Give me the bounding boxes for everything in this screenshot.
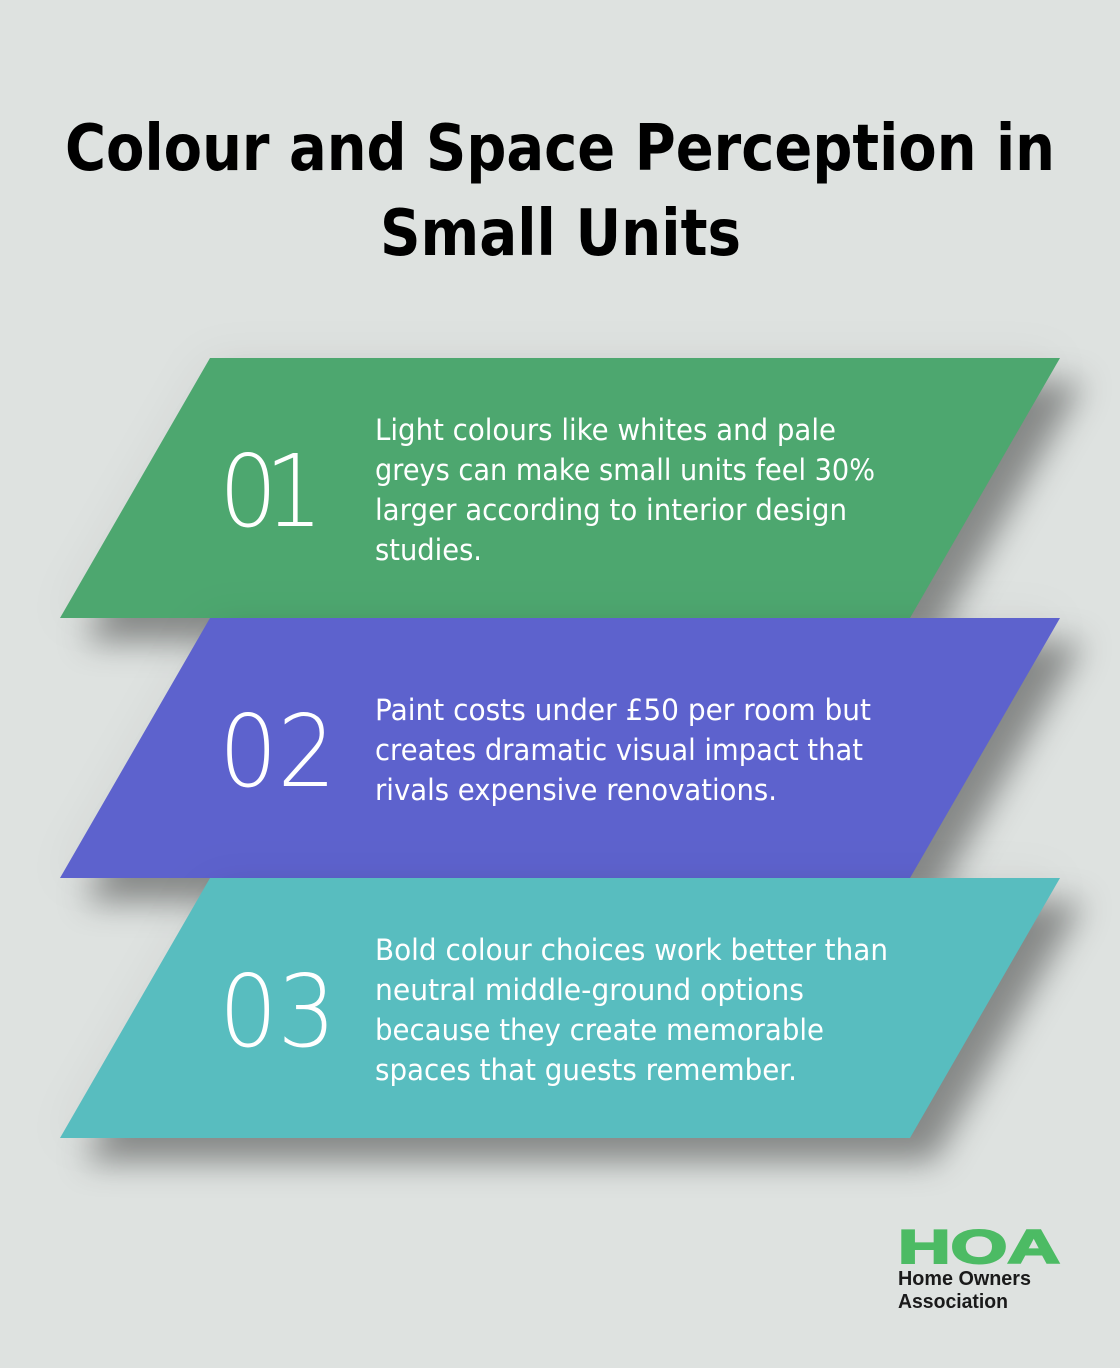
panel: step 03 — [60, 878, 1084, 1162]
title: Small Units — [380, 197, 741, 271]
text: step 03 description: neutral middle-ground options — [375, 973, 804, 1007]
text: step 03 description — [375, 933, 888, 1087]
panel: step 01 — [60, 358, 1084, 642]
text: step 02 description: creates dramatic visual impact that — [375, 733, 863, 767]
shape: teal parallelogram — [60, 878, 1060, 1138]
text: step 02 description — [375, 693, 871, 807]
text: step 02 description: Paint costs under £50 per room but — [375, 693, 871, 727]
logo subtitle: Home Owners — [898, 1268, 1031, 1290]
logo subtitle: Association — [898, 1291, 1008, 1313]
logo: HOA — [898, 1220, 1060, 1313]
shape: green parallelogram — [60, 358, 1060, 618]
text: step 01 description: Light colours like whites and pale — [375, 413, 836, 447]
shape: purple parallelogram — [60, 618, 1060, 878]
text: step 01 description — [375, 413, 875, 567]
text: step 03 description: spaces that guests remember. — [375, 1053, 797, 1087]
number 01: 01 — [219, 433, 323, 550]
text: step 03 description: Bold colour choices work better than — [375, 933, 888, 967]
logo subtitle — [898, 1268, 1031, 1313]
text: step 01 description: larger according to interior design — [375, 493, 847, 527]
title — [65, 112, 1055, 271]
logo wordmark: HOA — [898, 1220, 1060, 1273]
text: step 03 description: because they create memorable — [375, 1013, 824, 1047]
text: step 01 description: greys can make small units feel 30% — [375, 453, 875, 487]
text: step 01 description: studies. — [375, 533, 482, 567]
text: step 02 description: rivals expensive renovations. — [375, 773, 777, 807]
number 03: 03 — [219, 953, 336, 1070]
number 02: 02 — [219, 693, 336, 810]
panel: step 02 — [60, 618, 1084, 902]
